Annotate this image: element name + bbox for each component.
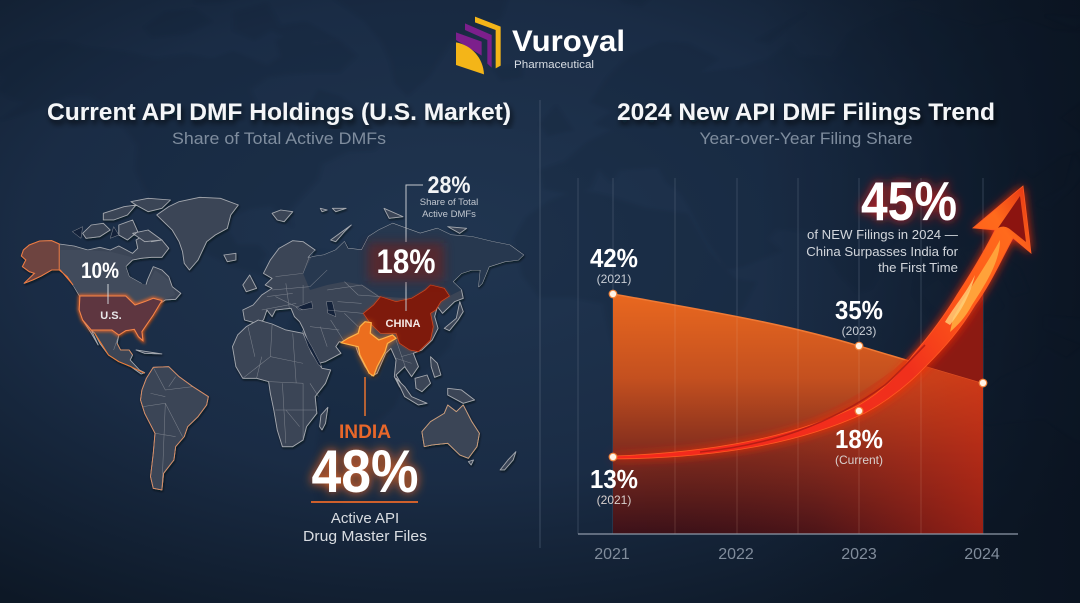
callout: 45%: 45% — [861, 170, 957, 232]
US callout: 10% — [81, 258, 119, 283]
callout: 45%: China Surpasses India for — [806, 244, 959, 259]
chart: x-axis labels: 2022 — [718, 546, 754, 563]
map: orange coast glows — [95, 333, 479, 490]
China callout — [368, 172, 478, 330]
map: highlighted United States — [79, 296, 162, 341]
India callout: 48% — [312, 438, 418, 505]
India callout: Drug Master Files — [303, 528, 427, 545]
India callout: INDIA — [339, 422, 391, 443]
label: 13% — [590, 464, 638, 507]
callout: 45% — [806, 170, 959, 275]
India callout — [303, 377, 427, 545]
callout: 45%: of NEW Filings in 2024 — — [807, 227, 959, 242]
China callout: Share of Total — [420, 197, 478, 208]
right heading: 2024 New API DMF Filings Trend — [617, 99, 995, 126]
US callout — [81, 258, 122, 322]
callout: 45%: the First Time — [878, 260, 958, 275]
China callout: 28% — [428, 172, 470, 199]
map: highlighted India — [341, 322, 396, 376]
China callout: CHINA — [386, 318, 421, 330]
label: 35%: 35% — [835, 295, 883, 325]
chart: x-axis labels: 2021 — [594, 546, 630, 563]
left subheading: Share of Total Active DMFs — [172, 129, 386, 148]
map: highlighted Alaska — [21, 241, 73, 285]
chart: India share line — [613, 294, 983, 383]
logo tagline: Pharmaceutical — [514, 59, 594, 71]
world map panel — [21, 172, 523, 545]
logo — [456, 17, 625, 74]
label: 42%: (2021) — [597, 272, 631, 286]
logo name: Vuroyal — [512, 25, 625, 58]
right subheading: Year-over-Year Filing Share — [700, 129, 912, 148]
chart: x-axis labels: 2023 — [841, 546, 877, 563]
arrow: China growth — [613, 186, 1031, 459]
label: 42%: 42% — [590, 243, 638, 273]
trend chart panel — [578, 170, 1031, 563]
chart: China share area — [613, 266, 983, 534]
map: highlighted China — [363, 285, 449, 352]
chart: India share area — [613, 294, 983, 534]
chart: axis — [578, 533, 1018, 535]
icon: logo mark — [456, 17, 501, 74]
label: 18%: (Current) — [835, 453, 883, 467]
label: 42% — [590, 243, 638, 286]
India callout: 48% — [312, 438, 418, 505]
label: 35% — [835, 295, 883, 338]
chart: data points — [609, 290, 987, 461]
callout: 45%: 45% — [861, 170, 957, 232]
India callout: Active API — [331, 510, 399, 527]
chart: x-axis labels: 2024 — [964, 546, 1000, 563]
label: 13%: 13% — [590, 464, 638, 494]
label: 35%: (2023) — [842, 324, 876, 338]
map: Russia and Central Asia tone — [303, 223, 523, 298]
US callout: U.S. — [100, 310, 122, 322]
label: 13%: (2021) — [597, 493, 631, 507]
China callout: Active DMFs — [422, 209, 476, 220]
left heading: Current API DMF Holdings (U.S. Market) — [47, 99, 511, 126]
map: seas and lakes — [72, 227, 336, 367]
label: 18% — [835, 424, 883, 467]
chart: x-axis labels — [594, 546, 1000, 563]
China callout: 18% — [376, 243, 436, 281]
label: 18%: 18% — [835, 424, 883, 454]
map: continents — [21, 197, 523, 490]
chart: grid lines — [578, 178, 983, 534]
